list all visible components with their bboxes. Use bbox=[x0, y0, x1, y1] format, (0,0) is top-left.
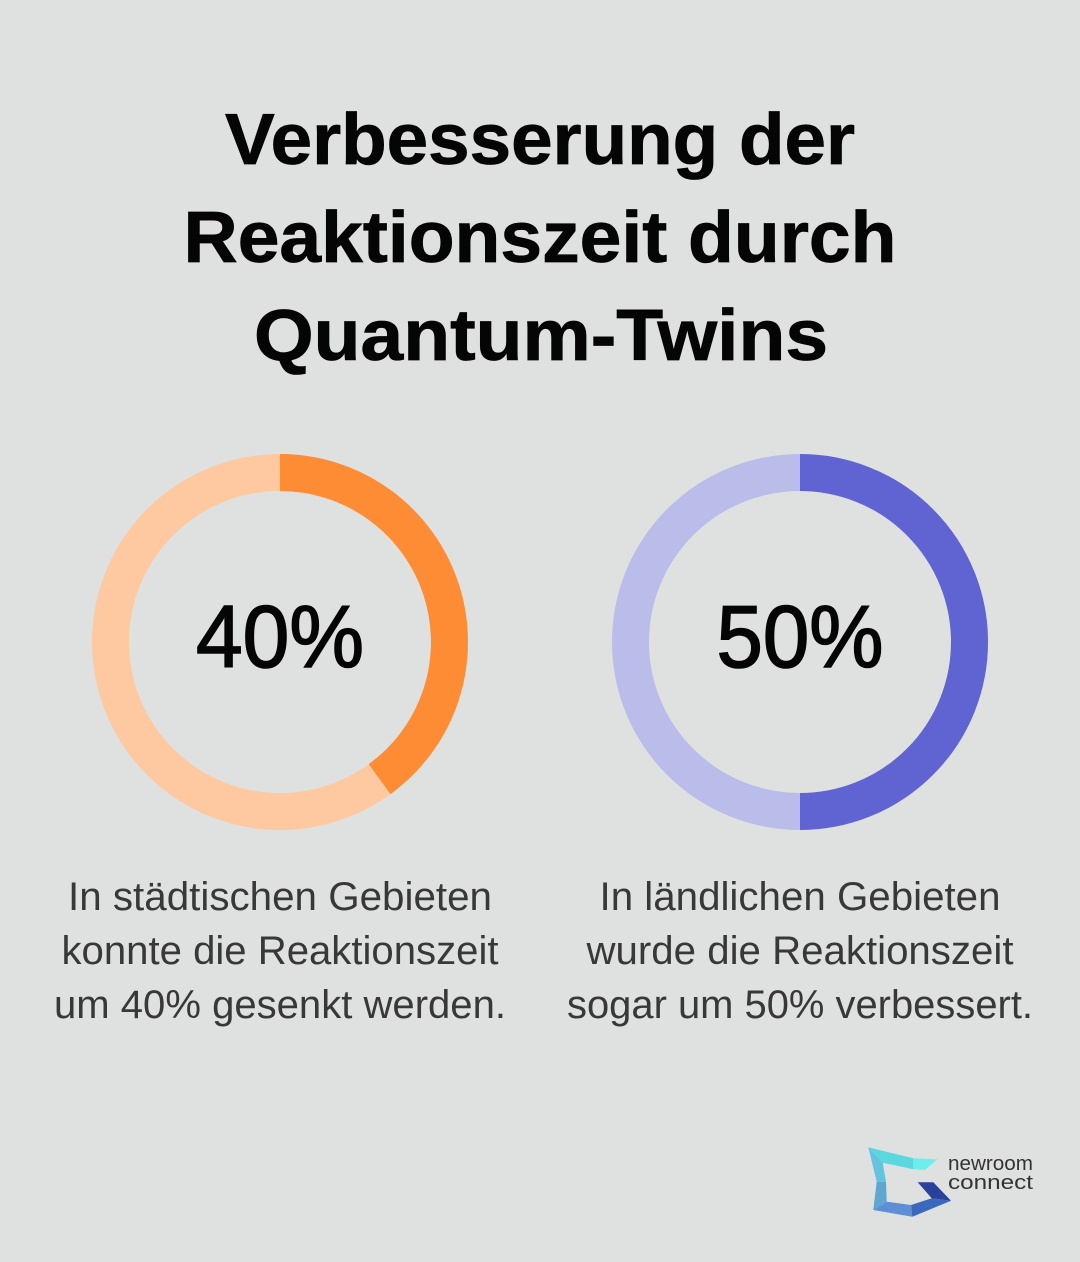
value: 40%: 40% bbox=[196, 587, 364, 686]
description: urban areas: konnte die Reaktionszeit bbox=[62, 929, 499, 973]
title bbox=[184, 100, 896, 376]
logo wordmark bbox=[948, 1153, 1034, 1194]
description: rural areas bbox=[567, 875, 1033, 1027]
panel: urban areas 40% bbox=[54, 472, 506, 1027]
description: rural areas: sogar um 50% verbessert. bbox=[567, 983, 1033, 1027]
value: 50%: 50% bbox=[716, 587, 884, 686]
description: rural areas: In ländlichen Gebieten bbox=[600, 875, 1000, 919]
logo wordmark: connect bbox=[948, 1172, 1034, 1194]
description: urban areas: um 40% gesenkt werden. bbox=[54, 983, 506, 1027]
donut chart: 40% bbox=[110, 472, 450, 812]
donut chart: 50% bbox=[630, 472, 970, 812]
panel: rural areas 50% bbox=[567, 472, 1033, 1027]
title: Reaktionszeit durch bbox=[184, 198, 896, 278]
logo: newroom connect bbox=[868, 1147, 1034, 1217]
title: Quantum-Twins bbox=[254, 296, 828, 376]
description: urban areas bbox=[54, 875, 506, 1027]
logo wordmark: newroom bbox=[948, 1153, 1033, 1175]
description: rural areas: wurde die Reaktionszeit bbox=[585, 929, 1014, 973]
title: Verbesserung der bbox=[225, 100, 855, 180]
logo icon bbox=[868, 1147, 951, 1217]
description: urban areas: In städtischen Gebieten bbox=[68, 875, 492, 919]
